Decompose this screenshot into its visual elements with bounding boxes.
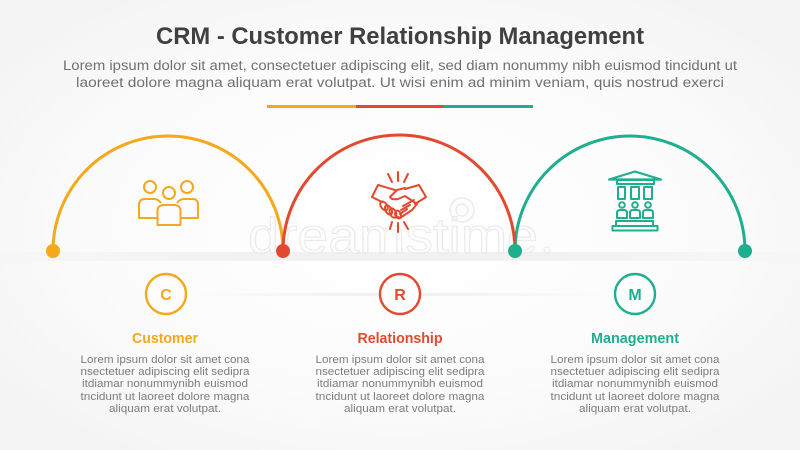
text block: management: nsectetuer adipiscing elit sedipra <box>550 366 720 378</box>
heading: Management: Management <box>591 331 679 347</box>
text block: management: aliquam erat volutpat. <box>579 403 691 415</box>
text block: relationship: tncidunt ut laoreet dolore magna <box>316 391 485 403</box>
badge: M <box>615 274 655 314</box>
horizontal floor band <box>0 252 800 261</box>
tricolour divider <box>267 105 533 108</box>
title: CRM - Customer Relationship Management <box>156 23 644 50</box>
icon: bank building with people <box>609 172 661 230</box>
watermark: dreamstime <box>248 208 538 264</box>
node: arc joint <box>508 244 522 258</box>
connector line behind letter circles <box>190 293 610 296</box>
text block: relationship: aliquam erat volutpat. <box>344 403 456 415</box>
text block: relationship: itdiamar nonummynibh euismod <box>317 378 483 390</box>
text block: relationship <box>316 354 485 415</box>
icon: handshake <box>372 172 426 232</box>
badge: C <box>146 274 186 314</box>
badge: M: M <box>628 287 642 304</box>
text block: management: Lorem ipsum dolor sit amet cona <box>550 354 720 366</box>
icon: people group <box>139 181 198 225</box>
arc: relationship <box>276 135 515 258</box>
arc: customer <box>46 136 283 258</box>
heading: Customer: Customer <box>132 331 198 347</box>
subtitle text block: laoreet dolore magna aliquam erat volutpat. Ut wisi enim ad minim veniam, quis nostrud exerci <box>76 75 724 90</box>
subtitle text block <box>63 58 737 90</box>
badge: C: C <box>160 287 172 304</box>
text block: management <box>550 354 720 415</box>
heading: Relationship: Relationship <box>358 331 443 347</box>
arc: management <box>515 136 752 258</box>
text block: customer: aliquam erat volutpat. <box>109 403 221 415</box>
badge: R <box>380 274 420 314</box>
text block: customer: Lorem ipsum dolor sit amet cona <box>80 354 250 366</box>
text block: management: tncidunt ut laoreet dolore magna <box>550 391 720 403</box>
text block: customer: tncidunt ut laoreet dolore magna <box>80 391 250 403</box>
text block: relationship: Lorem ipsum dolor sit amet cona <box>316 354 485 366</box>
badge: R: R <box>394 287 406 304</box>
text block: relationship: nsectetuer adipiscing elit sedipra <box>316 366 485 378</box>
subtitle text block: Lorem ipsum dolor sit amet, consectetuer adipiscing elit, sed diam nonummy nibh euismod tincidunt ut <box>63 58 737 73</box>
text block: management: itdiamar nonummynibh euismod <box>552 378 718 390</box>
text block: customer <box>80 354 250 415</box>
text block: customer: nsectetuer adipiscing elit sedipra <box>80 366 250 378</box>
text block: customer: itdiamar nonummynibh euismod <box>82 378 248 390</box>
